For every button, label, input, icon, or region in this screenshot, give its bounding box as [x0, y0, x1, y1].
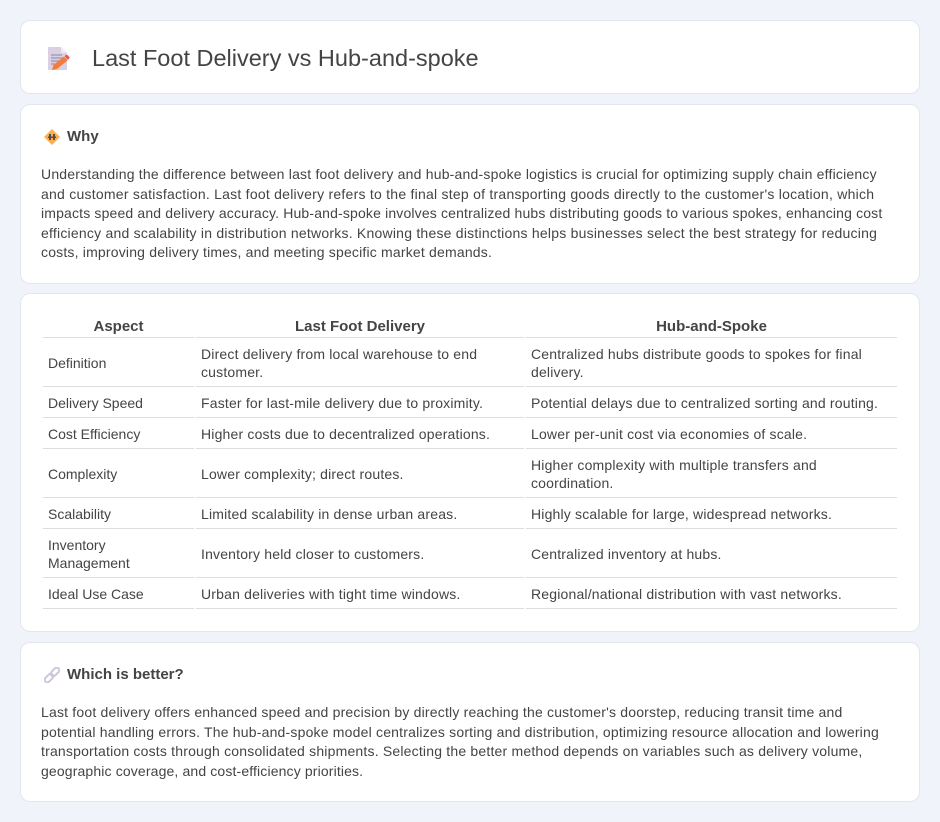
comparison table: Hub-and-Spoke [656, 318, 767, 335]
panel: header [20, 20, 920, 94]
comparison table: Inventory held closer to customers. [201, 546, 424, 562]
text block: which is better: Last foot delivery offers enhanced speed and precision by directly reaching the customer's doorstep, reducing transit time and [41, 704, 842, 720]
comparison table: Lower per-unit cost via economies of scale. [531, 426, 807, 442]
text block: why: and customer satisfaction. Last foot delivery refers to the final step of transporting goods directly to the customer's location, which [41, 186, 874, 202]
panel: which is better [20, 642, 920, 802]
text block: which is better: transportation costs through consolidated shipments. Selecting the better method depends on variables such as delivery volume, [41, 743, 862, 759]
comparison table: Ideal Use Case [48, 586, 144, 602]
comparison table: Last Foot Delivery [295, 318, 425, 335]
comparison table: delivery. [531, 364, 584, 380]
comparison table: Centralized inventory at hubs. [531, 546, 722, 562]
text block: why: costs, improving delivery times, and meeting specific market demands. [41, 244, 492, 260]
comparison table: Inventory [48, 537, 106, 553]
comparison table: Definition [48, 355, 106, 371]
comparison table: Limited scalability in dense urban areas. [201, 506, 457, 522]
title: Last Foot Delivery vs Hub-and-spoke [92, 45, 479, 71]
comparison table: Complexity [48, 466, 117, 482]
text block: why: Understanding the difference between last foot delivery and hub-and-spoke logistics is crucial for optimizing supply chain efficiency [41, 166, 877, 182]
comparison table: Faster for last-mile delivery due to proximity. [201, 395, 483, 411]
comparison table: Centralized hubs distribute goods to spokes for final [531, 346, 862, 362]
comparison table: Aspect [93, 318, 144, 335]
comparison table: coordination. [531, 475, 614, 491]
text block: why [41, 166, 882, 260]
panel: comparison table [20, 293, 920, 632]
heading: which is better: Which is better? [67, 666, 184, 683]
comparison table: Cost Efficiency [48, 426, 140, 442]
comparison table: Higher costs due to decentralized operations. [201, 426, 490, 442]
heading: why: Why [67, 128, 99, 145]
text block: why: impacts speed and delivery accuracy. Hub-and-spoke involves centralized hubs distributing goods to various spokes, enhancing cost [41, 205, 882, 221]
text block: which is better: potential handling errors. The hub-and-spoke model centralizes sorting and distribution, optimizing resource allocation and lowering [41, 724, 879, 740]
comparison table: Management [48, 555, 130, 571]
comparison table [43, 318, 897, 609]
icon: chain link [44, 667, 60, 683]
icon: document with pencil [48, 47, 70, 70]
comparison table: Highly scalable for large, widespread networks. [531, 506, 832, 522]
panel: why [20, 104, 920, 284]
text block: why: efficiency and scalability in distribution networks. Knowing these distinctions helps businesses select the best strategy for reducing [41, 225, 877, 241]
comparison table: Higher complexity with multiple transfers and [531, 457, 817, 473]
comparison table: Direct delivery from local warehouse to end [201, 346, 477, 362]
comparison table: Scalability [48, 506, 111, 522]
comparison table: Regional/national distribution with vast networks. [531, 586, 842, 602]
comparison table: Potential delays due to centralized sorting and routing. [531, 395, 878, 411]
text block: which is better: geographic coverage, and cost-efficiency priorities. [41, 763, 363, 779]
comparison table: Lower complexity; direct routes. [201, 466, 404, 482]
comparison table: customer. [201, 364, 263, 380]
text block: which is better [41, 704, 879, 779]
comparison table: Delivery Speed [48, 395, 143, 411]
comparison table: Urban deliveries with tight time windows. [201, 586, 460, 602]
icon: diamond sign [44, 129, 60, 145]
